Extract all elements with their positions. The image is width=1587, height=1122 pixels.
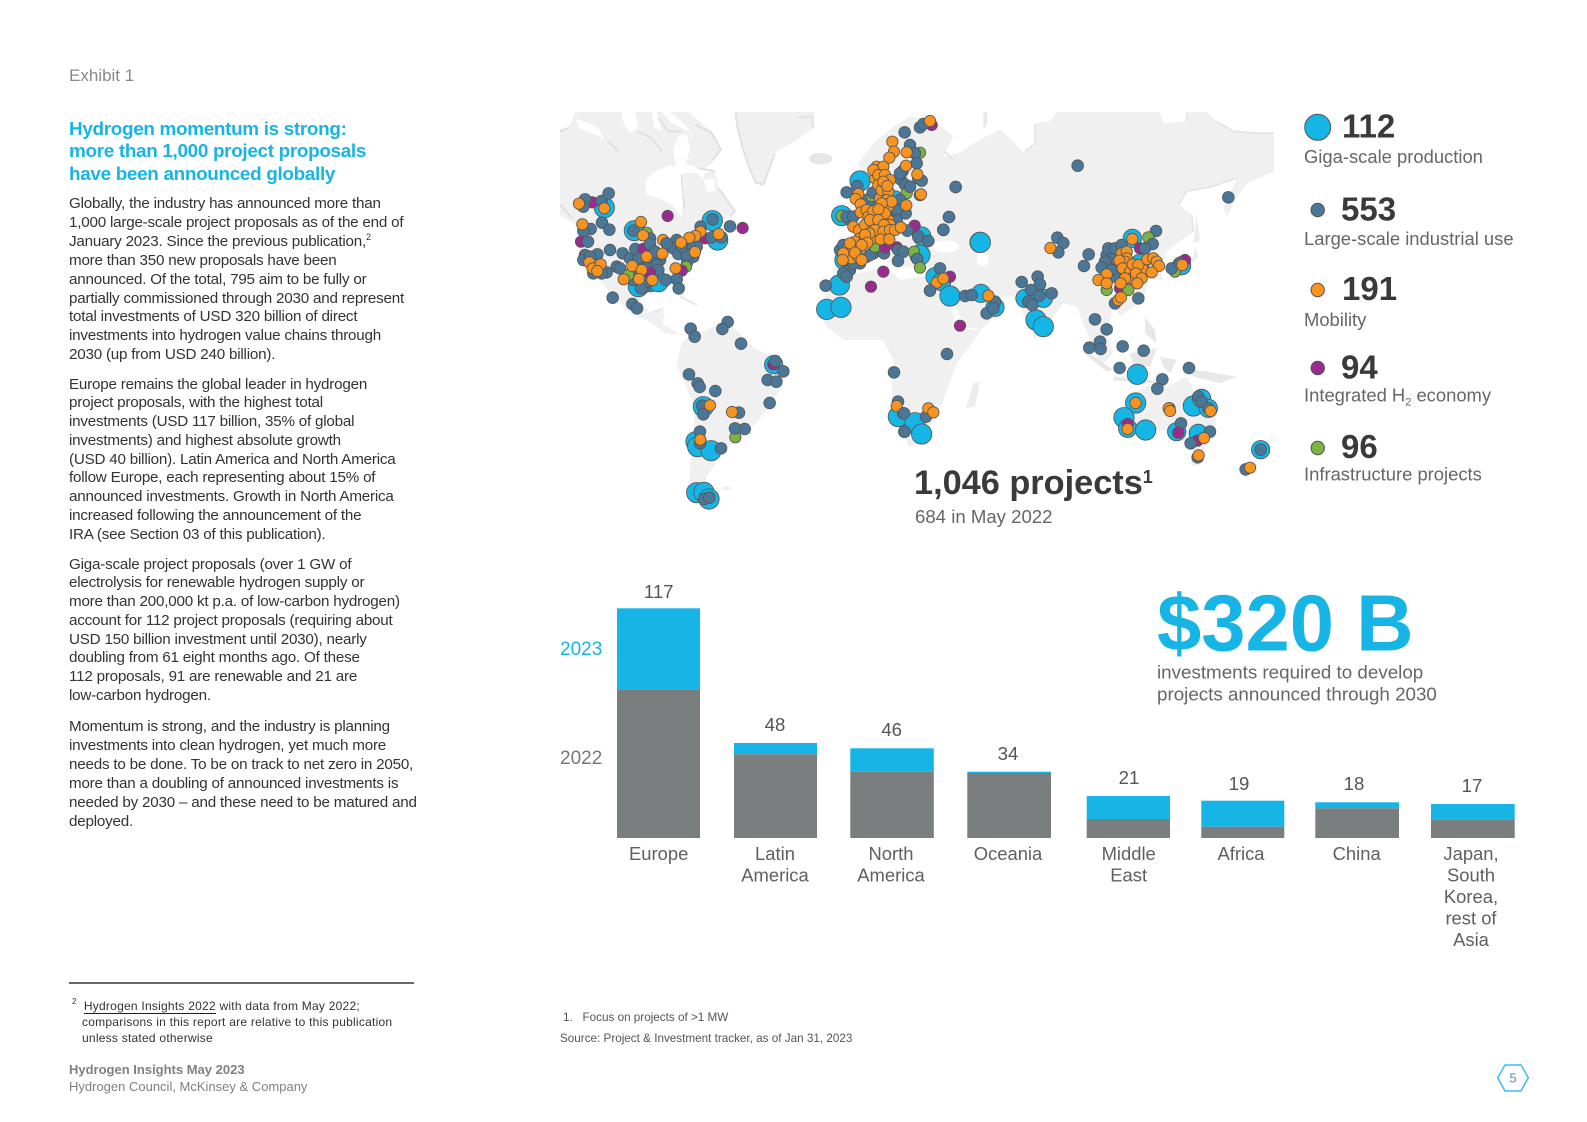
bar: Japan, South Korea, rest of Asia: 17 — [1462, 775, 1482, 796]
text block: global announcements: January 2023. Since the previous publication,2 — [69, 232, 371, 250]
text block: global announcements: partially commissioned through 2030 and represent — [69, 290, 404, 307]
bar: North America: America — [857, 864, 925, 886]
footnote 2 — [72, 997, 392, 1045]
text block: global announcements — [69, 195, 404, 363]
text block: momentum: more than a doubling of announced investments is — [69, 775, 398, 792]
text block: Europe leads: IRA (see Section 03 of this publication). — [69, 526, 325, 543]
note and source — [560, 1011, 852, 1045]
project total callout: 684 in May 2022 — [915, 506, 1052, 527]
bar: Oceania — [967, 743, 1051, 864]
map: land masses — [560, 112, 1275, 493]
text block: momentum: needed by 2030 – and these need to be matured and — [69, 794, 417, 811]
bar: North America — [850, 719, 934, 886]
text block: Europe leads: investments) and highest absolute growth — [69, 432, 341, 449]
legend: mobility: Mobility — [1304, 309, 1367, 330]
text block: global announcements: 2030 (up from USD 240 billion). — [69, 346, 275, 363]
world map with project dots — [560, 112, 1275, 509]
investment callout — [1157, 578, 1437, 705]
bar: Japan, South Korea, rest of Asia: Korea, — [1444, 886, 1498, 907]
text block: momentum: Momentum is strong, and the industry is planning — [69, 718, 390, 735]
footnote 2: 2 Hydrogen Insights 2022 with data from May 2022; — [72, 997, 360, 1013]
bar: China: 18 — [1344, 773, 1364, 794]
text block: global announcements: Globally, the industry has announced more than — [69, 195, 381, 212]
note and source: Source: Project & Investment tracker, as of Jan 31, 2023 — [560, 1032, 852, 1045]
text block: giga-scale proposals — [69, 556, 400, 704]
bar: North America: 46 — [881, 719, 902, 740]
bar: Oceania: Oceania — [974, 843, 1043, 864]
legend: infrastructure projects: Infrastructure projects — [1304, 464, 1482, 485]
bar: Africa: 19 — [1229, 773, 1249, 794]
legend: giga-scale production: 112 — [1342, 107, 1395, 144]
bar: Japan, South Korea, rest of Asia: Asia — [1453, 929, 1490, 950]
text block: global announcements: investments into hydrogen value chains through — [69, 327, 381, 344]
legend: infrastructure projects: 96 — [1341, 428, 1378, 465]
investment callout: investments required to develop — [1157, 661, 1423, 682]
text block: global announcements: total investments of USD 320 billion of direct — [69, 308, 357, 325]
footer: publication — [69, 1062, 308, 1094]
footer: publication: Hydrogen Council, McKinsey & Company — [69, 1078, 307, 1094]
bar: Japan, South Korea, rest of Asia: rest of — [1445, 908, 1497, 928]
heading: Hydrogen momentum is strong: — [69, 119, 347, 140]
note and source: 1. Focus on projects of >1 MW — [563, 1011, 728, 1024]
project total callout: 1 — [1143, 467, 1153, 487]
text block: giga-scale proposals: electrolysis for renewable hydrogen supply or — [69, 574, 364, 591]
text block: Europe leads — [69, 376, 396, 543]
footnote 2: unless stated otherwise — [82, 1031, 213, 1045]
legend: giga-scale production: Giga-scale production — [1304, 146, 1483, 167]
text block: momentum: needs to be done. To be on track to net zero in 2050, — [69, 756, 413, 773]
text block: giga-scale proposals: more than 200,000 kt p.a. of low-carbon hydrogen) — [69, 593, 400, 610]
footer: publication: Hydrogen Insights May 2023 — [69, 1062, 245, 1077]
legend: integrated H2 economy: 94 — [1341, 348, 1378, 386]
text block: momentum: investments into clean hydrogen, yet much more — [69, 737, 386, 754]
exhibit label: Exhibit 1 — [69, 66, 134, 85]
text block: Europe leads: follow Europe, each representing about 15% of — [69, 469, 375, 486]
bar: China: China — [1333, 843, 1381, 864]
dots: Middle East, Asia and Oceania — [898, 160, 1270, 475]
bar chart: investments by region — [560, 581, 1515, 950]
bar: Europe — [617, 581, 700, 864]
bar: Middle East — [1087, 767, 1170, 886]
text block: momentum — [69, 718, 417, 830]
bar: Latin America: Latin — [755, 843, 795, 864]
legend: integrated H2 economy: economy — [1411, 385, 1492, 406]
bar: Japan, South Korea, rest of Asia: South — [1447, 864, 1495, 886]
legend: large-scale industrial use: 553 — [1341, 191, 1396, 228]
bar: Middle East: Middle — [1102, 843, 1156, 864]
page number hexagon — [1498, 1065, 1528, 1091]
legend: mobility: 191 — [1342, 270, 1397, 307]
heading: more than 1,000 project proposals — [69, 141, 366, 162]
text block: giga-scale proposals: account for 112 project proposals (requiring about — [69, 612, 393, 629]
bar: Middle East: 21 — [1119, 767, 1139, 788]
series key: 2023 — [560, 639, 602, 660]
legend: infrastructure projects — [1304, 428, 1482, 485]
legend: large-scale industrial use — [1304, 191, 1514, 249]
legend: mobility — [1304, 270, 1397, 330]
bar: Latin America — [734, 714, 817, 886]
bar: China — [1315, 773, 1399, 864]
series key: 2022 — [560, 748, 602, 769]
text block: Europe leads: announced investments. Growth in North America — [69, 488, 394, 505]
text block: global announcements: 1,000 large-scale project proposals as of the end of — [69, 214, 403, 231]
bar: Africa: Africa — [1217, 843, 1265, 864]
bar: North America: North — [869, 843, 913, 864]
legend: integrated H2 economy — [1304, 348, 1492, 409]
legend: giga-scale production — [1304, 107, 1483, 167]
bar: Japan, South Korea, rest of Asia: Japan, — [1443, 843, 1499, 864]
text block: momentum: deployed. — [69, 813, 133, 830]
text block: Europe leads: investments (USD 117 billion, 35% of global — [69, 413, 354, 430]
heading — [69, 119, 366, 184]
bar: Latin America: 48 — [765, 714, 785, 735]
project total callout: 1,046 projects — [914, 464, 1143, 502]
bar: Africa — [1201, 773, 1284, 864]
text block: Europe leads: Europe remains the global leader in hydrogen — [69, 376, 367, 392]
bar: Europe: 117 — [644, 581, 674, 602]
bar: Europe: Europe — [629, 843, 688, 864]
text block: Europe leads: (USD 40 billion). Latin America and North America — [69, 451, 396, 468]
investment callout: $320 B — [1157, 578, 1414, 668]
text block: global announcements: more than 350 new proposals have been — [69, 252, 336, 269]
legend: integrated H2 economy: Integrated H — [1304, 385, 1405, 406]
text block: giga-scale proposals: low-carbon hydrogen. — [69, 687, 211, 704]
dots: Americas and Africa — [573, 187, 910, 509]
legend: integrated H2 economy: 2 — [1405, 397, 1411, 409]
legend: large-scale industrial use: Large-scale industrial use — [1304, 228, 1514, 249]
text block: giga-scale proposals: Giga-scale project proposals (over 1 GW of — [69, 556, 351, 572]
text block: Europe leads: increased following the announcement of the — [69, 507, 361, 524]
text block: Europe leads: project proposals, with the highest total — [69, 394, 323, 411]
bar: Latin America: America — [741, 864, 809, 886]
series key — [560, 639, 602, 769]
page number hexagon: 5 — [1509, 1070, 1517, 1086]
text block: giga-scale proposals: 112 proposals, 91 are renewable and 21 are — [69, 668, 357, 685]
dots: Europe and North Africa — [816, 115, 990, 319]
bar: Middle East: East — [1110, 864, 1147, 886]
investment callout: projects announced through 2030 — [1157, 684, 1437, 705]
bar: Japan, South Korea, rest of Asia — [1431, 775, 1515, 950]
footnote 2: comparisons in this report are relative to this publication — [82, 1015, 392, 1029]
dots: China, Korea and Japan — [1093, 225, 1191, 309]
text block: global announcements: announced. Of the total, 795 aim to be fully or — [69, 271, 366, 288]
heading: have been announced globally — [69, 164, 335, 184]
text block: giga-scale proposals: doubling from 61 eight months ago. Of these — [69, 649, 360, 666]
project total callout — [914, 464, 1153, 527]
text block: giga-scale proposals: USD 150 billion investment until 2030), nearly — [69, 631, 367, 648]
bar: Oceania: 34 — [998, 743, 1018, 764]
